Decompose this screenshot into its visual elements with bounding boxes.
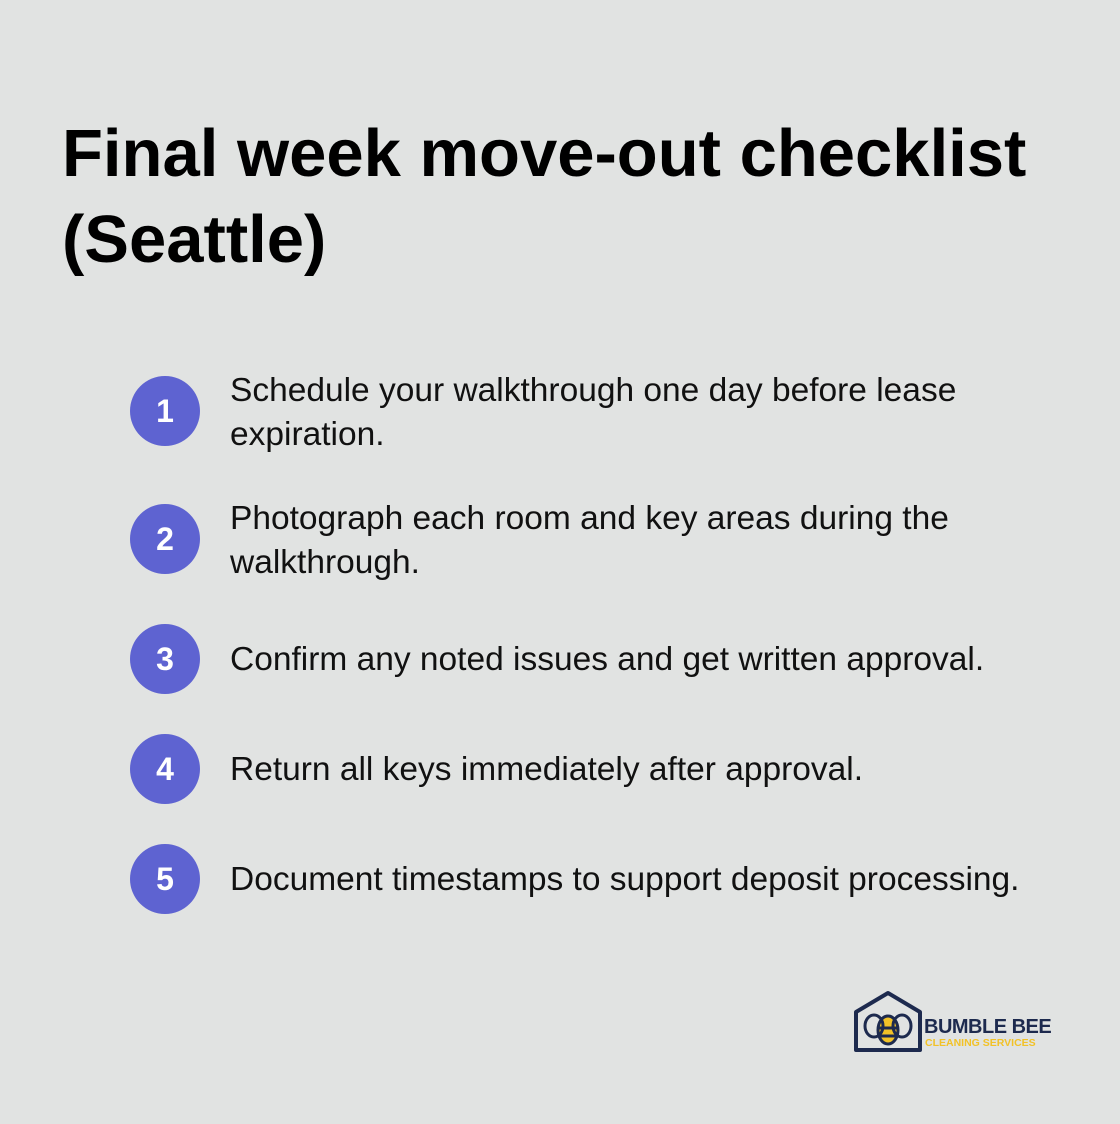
item 5: Document timestamps to support deposit processing. — [230, 861, 1020, 898]
icon: bee house — [854, 991, 922, 1052]
brand text: BUMBLE BEE — [924, 1016, 1051, 1038]
item 5: 5 — [156, 861, 174, 897]
item 4 — [130, 734, 863, 804]
item 5 — [130, 844, 1020, 914]
item 3: Confirm any noted issues and get written approval. — [230, 641, 984, 678]
item 3 — [130, 624, 984, 694]
item 2: 2 — [156, 521, 174, 557]
item 3: 3 — [156, 641, 174, 677]
item 4: 4 — [156, 751, 174, 787]
item 1: Schedule your walkthrough one day before lease expiration. — [230, 372, 956, 453]
title: Final week move-out checklist (Seattle) — [62, 116, 1026, 277]
item 1: 1 — [156, 393, 174, 429]
item 2: Photograph each room and key areas during the walkthrough. — [230, 500, 949, 581]
item 4: Return all keys immediately after approval. — [230, 751, 863, 788]
logo — [854, 991, 1051, 1052]
logo: CLEANING SERVICES — [925, 1037, 1036, 1049]
